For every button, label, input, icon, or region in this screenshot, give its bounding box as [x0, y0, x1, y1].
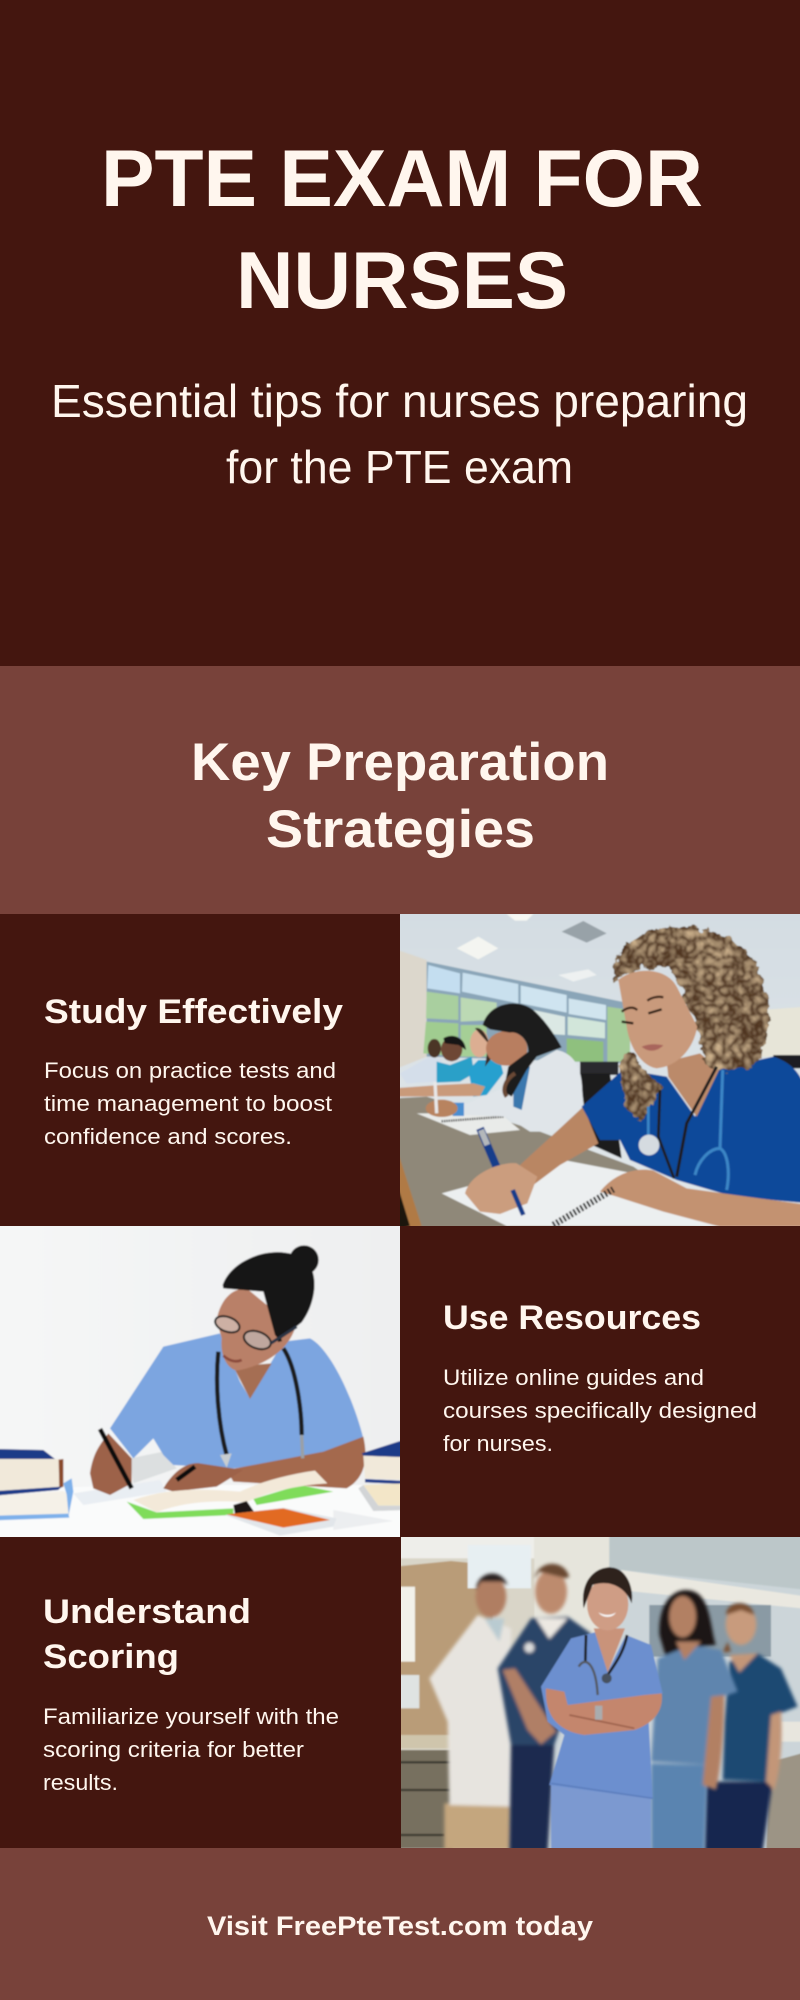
stack of books, right	[358, 1440, 407, 1511]
heading: key preparation strategies: Key Preparation	[191, 733, 609, 792]
heading: understand scoring: Understand	[43, 1593, 251, 1631]
stack of books, left	[0, 1449, 73, 1520]
man in navy scrubs	[498, 1564, 591, 1852]
nurse with long black hair	[651, 1590, 738, 1852]
title: PTE EXAM FOR	[101, 134, 703, 224]
subtitle: for the PTE exam	[226, 441, 573, 493]
back-row participants	[393, 1028, 503, 1097]
subtitle	[51, 375, 748, 493]
nurse figure	[90, 1245, 365, 1495]
panel: key preparation strategies band	[0, 666, 800, 914]
panel: study effectively	[0, 914, 400, 1226]
text: use resources body: for nurses.	[443, 1431, 553, 1456]
photo: nurses writing at a conference table	[400, 914, 800, 1226]
heading: use resources: Use Resources	[443, 1299, 701, 1337]
woman in white coat	[417, 1003, 582, 1135]
heading: key preparation strategies: Strategies	[266, 800, 535, 859]
text: study effectively body: Focus on practice tests and	[44, 1058, 336, 1083]
text: use resources body: courses specifically designed	[443, 1398, 757, 1423]
text: understand scoring body	[43, 1704, 339, 1795]
curly hair	[614, 927, 768, 1122]
photo: medical team standing in a hospital	[401, 1537, 800, 1848]
text: study effectively body: time management to boost	[44, 1091, 333, 1116]
heading: understand scoring: Scoring	[43, 1638, 179, 1676]
text: understand scoring body: results.	[43, 1770, 118, 1795]
panel: understand scoring	[0, 1537, 400, 1848]
text: use resources body: Utilize online guides and	[443, 1365, 704, 1390]
orange notebook	[225, 1508, 393, 1536]
text: visit website: Visit FreePteTest.com today	[207, 1911, 593, 1941]
central smiling nurse	[541, 1567, 663, 1852]
text: study effectively body: confidence and scores.	[44, 1124, 292, 1149]
heading: study effectively: Study Effectively	[44, 993, 343, 1031]
title	[101, 134, 703, 326]
panel: use resources	[400, 1226, 800, 1537]
text: understand scoring body: scoring criteria for better	[43, 1737, 305, 1762]
wooden crate	[394, 1750, 453, 1848]
title: NURSES	[236, 236, 568, 326]
doctor in white coat	[429, 1573, 513, 1850]
panel: footer call to action	[0, 1848, 800, 2000]
seated nurse in blue scrubs	[442, 927, 800, 1227]
text: use resources body	[443, 1365, 757, 1456]
text: understand scoring body: Familiarize yourself with the	[43, 1704, 339, 1729]
heading: understand scoring	[43, 1593, 251, 1676]
nurse with dark scrubs, far right	[704, 1603, 798, 1852]
text: study effectively body	[44, 1058, 336, 1149]
panel: header	[51, 134, 748, 493]
open book on green folder	[127, 1471, 333, 1519]
heading: key preparation strategies	[191, 733, 609, 859]
photo: nurse studying at a desk with books	[0, 1226, 400, 1537]
subtitle: Essential tips for nurses preparing	[51, 375, 748, 427]
